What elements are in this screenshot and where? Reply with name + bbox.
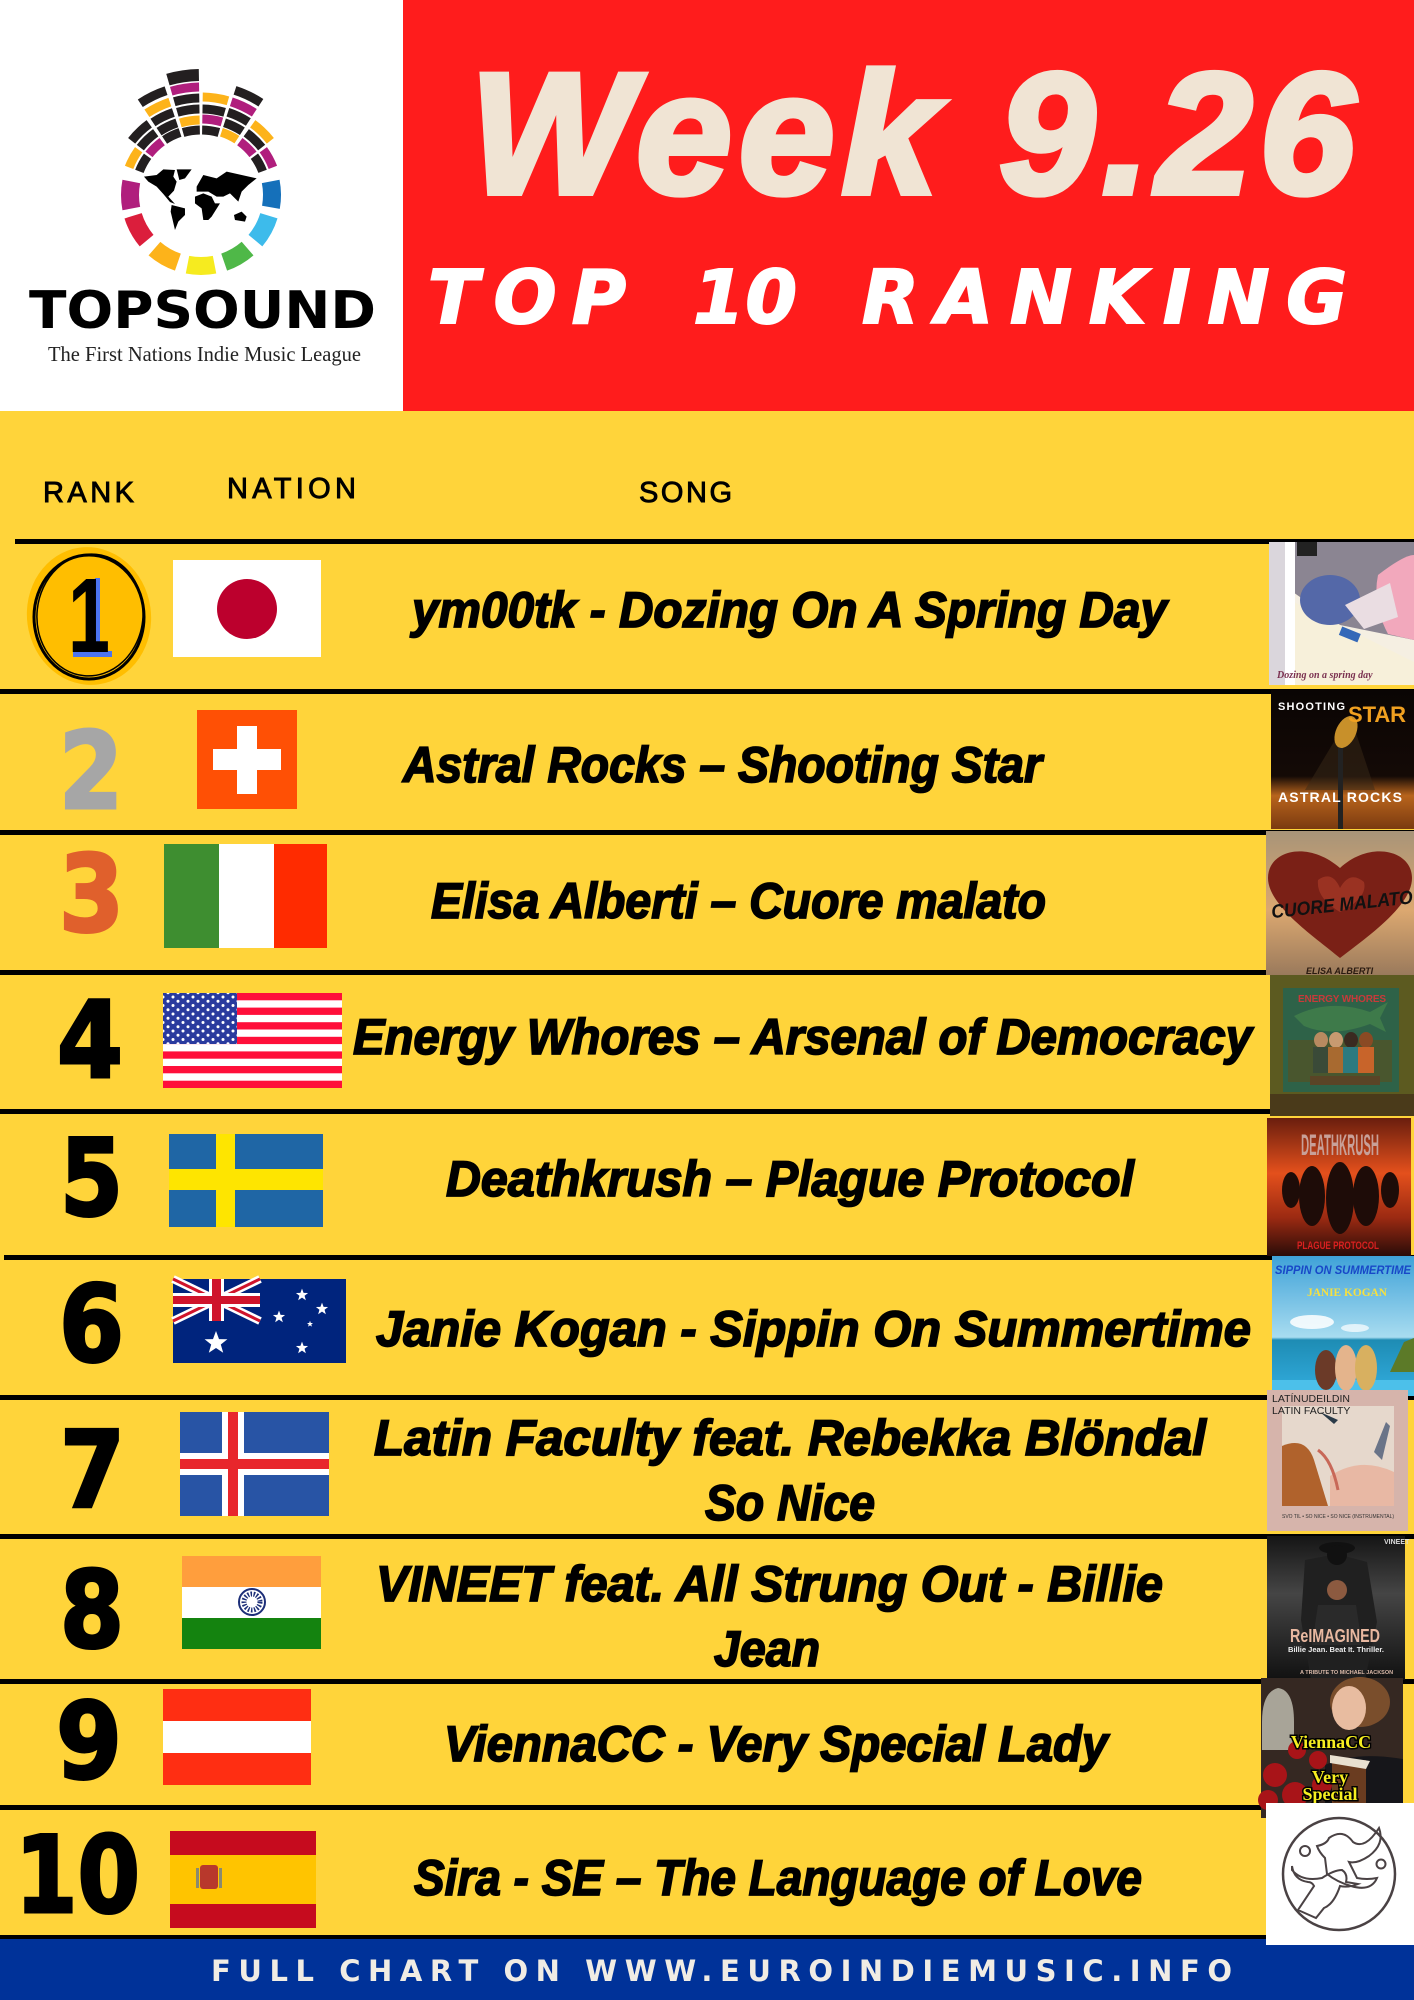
album cover: Cuore malato: ELISA ALBERTI [1306, 966, 1374, 976]
album cover: Shooting Star: STAR [1348, 702, 1406, 727]
icon: world map [144, 169, 257, 230]
song title: Energy Whores – Arsenal of Democracy [353, 1009, 1254, 1065]
subtitle [428, 255, 1347, 341]
song title: ViennaCC - Very Special Lady [444, 1716, 1110, 1772]
song title: Astral Rocks – Shooting Star [401, 737, 1044, 793]
album cover: ReIMAGINED: Billie Jean. Beat It. Thriller. [1288, 1645, 1384, 1654]
album cover: Arsenal of Democracy: ENERGY WHORES [1298, 994, 1386, 1005]
album cover: Sippin On Summertime: JANIE KOGAN [1307, 1285, 1387, 1299]
rank number: 2 [59, 710, 123, 833]
rank number: 4 [57, 979, 123, 1102]
subtitle: RANKING [862, 255, 1347, 341]
flag: Switzerland [197, 710, 297, 809]
album cover: Shooting Star: ASTRAL ROCKS [1278, 789, 1402, 805]
brand name: TOPSOUND [29, 281, 376, 341]
song title: ym00tk - Dozing On A Spring Day [409, 582, 1169, 638]
row 6 [59, 1256, 1414, 1396]
album cover: Very Special: ViennaCC [1291, 1732, 1371, 1752]
album cover: Very Special [1258, 1677, 1403, 1818]
album cover: Very Special: Very [1312, 1767, 1348, 1787]
album cover: Plague Protocol [1267, 1118, 1411, 1256]
flag: Italy [164, 844, 327, 948]
flag: Australia [173, 1279, 346, 1363]
row 8 [60, 1536, 1410, 1680]
rank number: 10 [15, 1814, 140, 1937]
album cover: Shooting Star: SHOOTING [1278, 701, 1345, 713]
footer text: FULL CHART ON WWW.EUROINDIEMUSIC.INFO [211, 1954, 1232, 1988]
flag: India [182, 1556, 321, 1649]
flag: Spain [170, 1831, 316, 1928]
flag: Iceland [180, 1412, 329, 1516]
song title line 2: Jean [714, 1621, 820, 1677]
title panel [403, 0, 1414, 411]
row 10 [15, 1803, 1414, 1945]
flag: Austria [163, 1689, 311, 1785]
album cover: ReIMAGINED [1267, 1536, 1410, 1680]
subtitle: 10 [693, 255, 797, 341]
song title line 1: VINEET feat. All Strung Out - Billie [376, 1556, 1163, 1612]
logo panel: TOPSOUND [0, 0, 403, 411]
logo mark: ring and equalizer [49, 43, 353, 347]
song title: Deathkrush – Plague Protocol [446, 1151, 1135, 1207]
table header [43, 473, 732, 509]
album cover: So Nice: LATÍNUDEILDIN [1272, 1392, 1350, 1405]
subtitle: TOP [428, 255, 626, 341]
column label: nation: NATION [227, 473, 356, 505]
rank 1 badge [18, 539, 160, 693]
album cover: The Language of Love [1266, 1803, 1414, 1945]
flag: Sweden [169, 1134, 323, 1227]
album cover: So Nice: SVO TIL • SO NICE • SO NICE (INSTRUMENTAL) [1282, 1514, 1394, 1520]
album cover: Shooting Star [1271, 690, 1414, 829]
row 7 [60, 1390, 1408, 1532]
row 9 [56, 1677, 1403, 1818]
rank number: 8 [60, 1549, 124, 1672]
row 2 [59, 690, 1414, 833]
song title: Sira - SE – The Language of Love [414, 1850, 1142, 1906]
flag: USA [163, 993, 342, 1088]
album cover: Sippin On Summertime [1272, 1256, 1414, 1396]
album cover: Plague Protocol: PLAGUE PROTOCOL [1297, 1240, 1379, 1252]
title: week: Week 9.26 [470, 38, 1356, 230]
row 5 [60, 1117, 1411, 1256]
column label: rank: RANK [43, 477, 135, 509]
row 4 [57, 975, 1414, 1116]
album cover: Arsenal of Democracy [1270, 975, 1414, 1116]
album cover: ReIMAGINED: ReIMAGINED [1290, 1626, 1380, 1646]
flag: Japan [173, 560, 321, 657]
album cover: Dozing on a spring day [1269, 542, 1414, 685]
album cover: Dozing on a spring day: Dozing on a spring day [1276, 670, 1373, 681]
album cover: ReIMAGINED: A TRIBUTE TO MICHAEL JACKSON [1300, 1670, 1393, 1676]
rank number: 3 [59, 833, 124, 956]
album cover: So Nice: LATIN FACULTY [1272, 1405, 1350, 1417]
rank 1 badge: 1 [68, 557, 110, 675]
column label: song: SONG [639, 477, 732, 509]
song title line 1: Latin Faculty feat. Rebekka Blöndal [374, 1410, 1207, 1466]
rank number: 9 [56, 1680, 122, 1803]
album cover: So Nice [1267, 1390, 1408, 1531]
song title: Elisa Alberti – Cuore malato [431, 873, 1046, 929]
row 3 [59, 831, 1414, 976]
tagline: The First Nations Indie Music League [48, 342, 361, 366]
rank number: 6 [59, 1263, 124, 1386]
footer band [0, 1939, 1414, 2000]
album cover: ReIMAGINED: VINEET [1384, 1539, 1410, 1546]
rank number: 7 [60, 1409, 125, 1532]
row 1 [18, 539, 1414, 693]
album cover: Cuore malato [1266, 831, 1414, 976]
song title: Janie Kogan - Sippin On Summertime [376, 1301, 1251, 1357]
song title line 2: So Nice [705, 1475, 875, 1531]
album cover: Very Special: Special [1302, 1784, 1358, 1804]
rank number: 5 [60, 1117, 123, 1240]
